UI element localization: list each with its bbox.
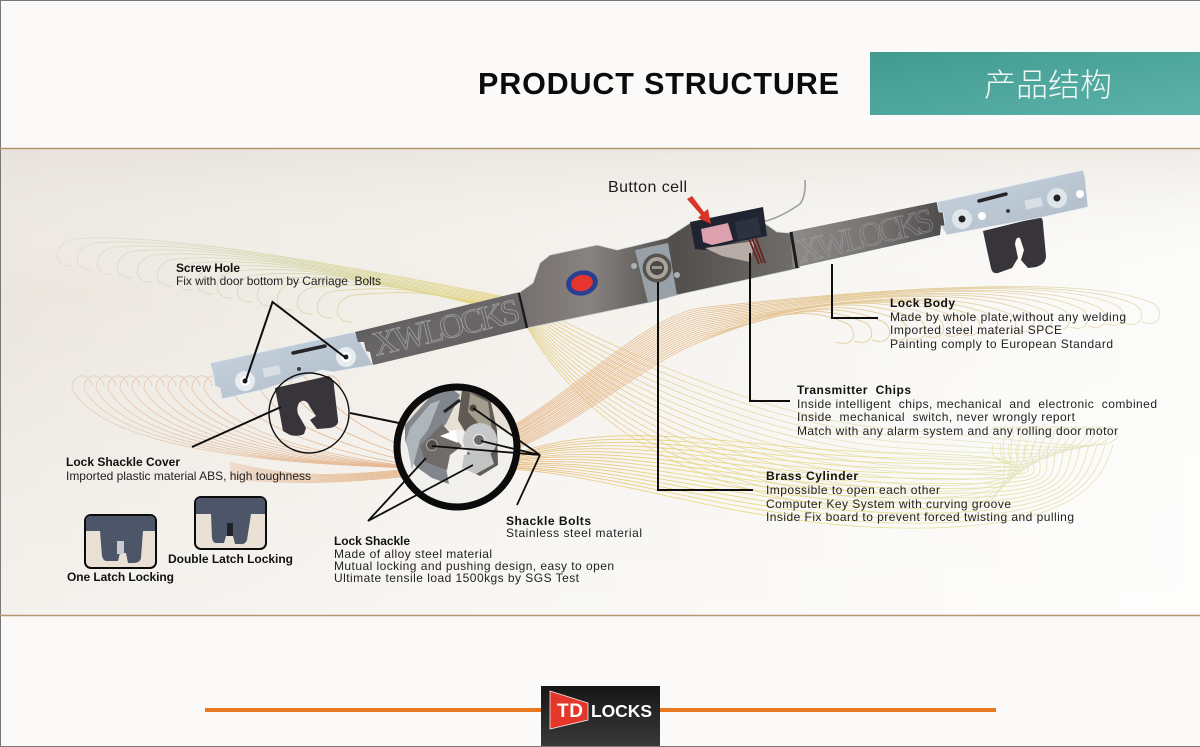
orange rule [205, 708, 996, 712]
left lock shackle [275, 376, 338, 436]
label: button cell: Button cell [608, 179, 687, 196]
text block: shackle bolts: Stainless steel material [506, 526, 642, 540]
swirl: top-right ribbon [230, 287, 1160, 483]
text block: screw hole: Screw Hole [176, 261, 240, 275]
header [478, 52, 1200, 115]
connector between circles [350, 413, 399, 423]
footer [205, 686, 996, 746]
leader lines: lock shackle [368, 458, 473, 521]
inset: one latch locking [67, 515, 174, 584]
right mounting plate [937, 170, 1088, 235]
logo: TD LOCKS: LOCKS [591, 701, 652, 721]
leader line: brass cylinder [658, 282, 753, 490]
text block: screw hole [176, 261, 381, 288]
brass cylinder and mount [631, 243, 680, 303]
text block: shackle bolts: Shackle Bolts [506, 514, 591, 528]
text block: transmitter chips: Inside mechanical switch, never wrongly report [797, 410, 1076, 424]
central panel background [0, 148, 1200, 616]
divider slot [519, 293, 527, 328]
leader lines: shackle bolts [432, 408, 540, 505]
text block: transmitter chips: Transmitter Chips [797, 383, 911, 397]
text block: shackle bolts [506, 514, 642, 540]
swirl: top-left ribbon [57, 238, 1117, 515]
text block: transmitter chips [797, 383, 1157, 438]
leader line: transmitter chips [750, 253, 790, 401]
text block: transmitter chips: Match with any alarm system and any rolling door motor [797, 424, 1118, 438]
text block: lock shackle cover: Imported plastic material ABS, high toughness [66, 469, 311, 483]
lens content [400, 390, 514, 484]
text block: lock shackle cover: Lock Shackle Cover [66, 455, 180, 469]
transmitter chip board with button cell [690, 180, 805, 264]
lens ring [397, 387, 517, 507]
text block: brass cylinder: Computer Key System with curving groove [766, 497, 1011, 511]
leader line: shackle cover [192, 407, 281, 447]
text block: lock shackle: Made of alloy steel material [334, 547, 492, 561]
text block: lock body: Made by whole plate,without any welding [890, 310, 1126, 324]
right lock shackle [983, 217, 1046, 273]
left mounting plate [210, 332, 373, 399]
text block: lock shackle: Ultimate tensile load 1500kgs by SGS Test [334, 571, 580, 585]
right steel section with XWLOCKS emboss: XWLOCKS [793, 202, 938, 271]
background swirl ribbons [57, 238, 1160, 528]
title: PRODUCT STRUCTURE [478, 67, 839, 101]
text block: lock shackle: Mutual locking and pushing design, easy to open [334, 559, 614, 573]
red arrow to button cell [687, 196, 711, 224]
text block: lock body: Lock Body [890, 296, 955, 310]
text block: transmitter chips: Inside intelligent chips, mechanical and electronic combined [797, 397, 1157, 411]
text block: lock shackle [334, 534, 614, 585]
chinese title box: 产品结构 [984, 60, 1112, 106]
leader line: lock body [832, 264, 878, 318]
text block: lock shackle cover [66, 455, 311, 483]
inset: double latch locking: Double Latch Locking [168, 552, 293, 566]
text block: brass cylinder: Brass Cylinder [766, 469, 858, 483]
text block: lock body: Imported steel material SPCE [890, 323, 1062, 337]
magnifier: shackle cover circle [269, 373, 349, 453]
leader lines: screw hole [245, 302, 346, 383]
left steel section with XWLOCKS emboss: XWLOCKS [369, 293, 524, 364]
text block: screw hole: Fix with door bottom by Carriage Bolts [176, 274, 381, 288]
chinese title box [870, 52, 1200, 115]
swirl: bottom-left ribbon [72, 376, 1113, 528]
text block: lock body [890, 296, 1126, 351]
logo: TD LOCKS: TD [557, 701, 583, 722]
text block: brass cylinder: Inside Fix board to prevent forced twisting and pulling [766, 510, 1074, 524]
lock body assembly [210, 170, 1088, 436]
text block: lock body: Painting comply to European Standard [890, 337, 1113, 351]
brand seal [564, 267, 600, 299]
text block: brass cylinder: Impossible to open each other [766, 483, 940, 497]
inset: double latch locking [168, 497, 293, 566]
middle steel section [520, 222, 800, 328]
magnified lock shackle detail [395, 385, 520, 510]
logo: TD LOCKS [541, 686, 660, 746]
inset: one latch locking: One Latch Locking [67, 570, 174, 584]
text block: lock shackle: Lock Shackle [334, 534, 410, 548]
text block: brass cylinder [766, 469, 1074, 524]
